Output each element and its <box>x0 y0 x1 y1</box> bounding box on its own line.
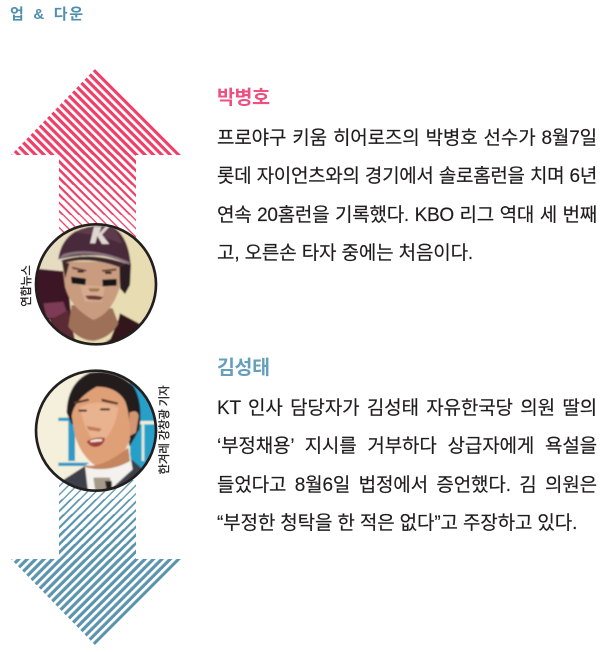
heading: Park Byung-ho: 박병호 <box>217 87 270 109</box>
text block: Park Byung-ho: 롯데 자이언츠와의 경기에서 솔로홈런을 치며 6년 <box>217 166 597 187</box>
text block: Park Byung-ho <box>217 128 597 264</box>
text block: Park Byung-ho: 고, 오른손 타자 중에는 처음이다. <box>217 243 473 264</box>
heading: Kim Seong-tae: 김성태 <box>217 357 270 379</box>
text block: Park Byung-ho: 프로야구 키움 히어로즈의 박병호 선수가 8월7일 <box>217 128 597 149</box>
text block: Kim Seong-tae: ‘부정채용’ 지시를 거부하다 상급자에게 욕설을 <box>217 436 597 457</box>
photo credit: Yonhap: 연합뉴스 <box>21 265 33 307</box>
text block: Park Byung-ho: 연속 20홈런을 기록했다. KBO 리그 역대 세 번째 <box>217 205 597 226</box>
text block: Kim Seong-tae: KT 인사 담당자가 김성태 자유한국당 의원 딸의 <box>217 398 597 419</box>
photo: Park Byung-ho portrait <box>34 223 158 346</box>
title: 업 & 다운 <box>10 6 85 23</box>
text block: Kim Seong-tae: 들었다고 8월6일 법정에서 증언했다. 김 의원은 <box>217 475 597 496</box>
photo: Kim Seong-tae portrait <box>34 369 158 492</box>
text block: Kim Seong-tae: “부정한 청탁을 한 적은 없다”고 주장하고 있다. <box>217 513 577 534</box>
photo credit: Hankyoreh: 한겨레 강창광 기자 <box>159 385 171 475</box>
text block: Kim Seong-tae <box>217 398 597 534</box>
